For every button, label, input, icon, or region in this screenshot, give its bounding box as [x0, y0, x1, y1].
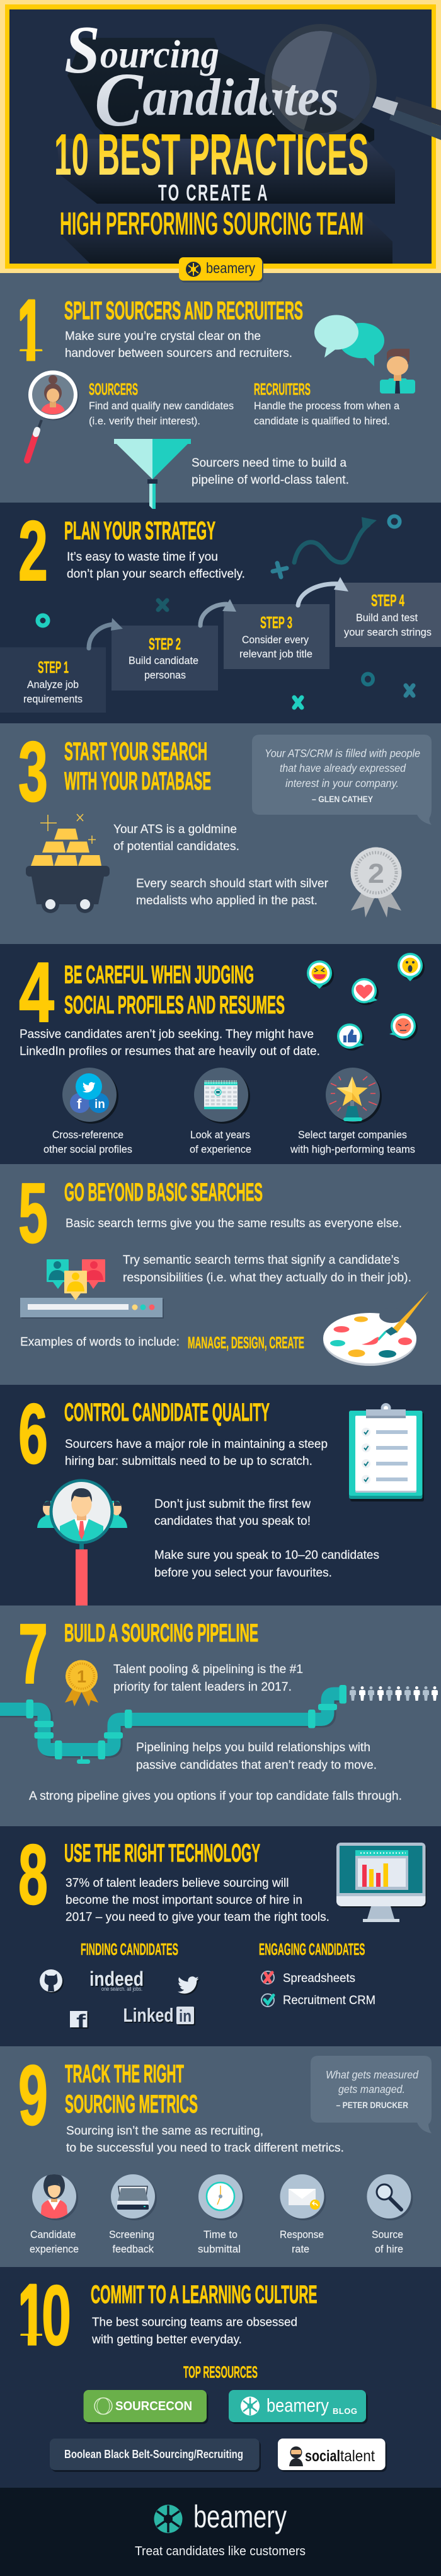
quote bubble: [252, 735, 432, 825]
arrow step 1 to 2: [89, 618, 123, 648]
candidates text: Don’t just submit the first few: [154, 1497, 311, 1511]
intro text: become the most important source of hire in: [66, 1893, 302, 1907]
funnel text: pipeline of world-class talent.: [192, 473, 349, 487]
icon: palette: [323, 1291, 429, 1366]
heading 8: USE THE RIGHT TECHNOLOGY: [64, 1839, 260, 1867]
icon: search bar with pins: [20, 1259, 164, 1319]
label: experience: [30, 2243, 79, 2255]
number 6: 6: [18, 1386, 48, 1481]
number 7: 7: [18, 1606, 48, 1701]
button: socialtalent: [278, 2439, 387, 2472]
label: [280, 2229, 324, 2255]
button: beamery blog: BLOG: [333, 2406, 357, 2416]
number 8: 8: [18, 1827, 48, 1922]
intro text: [65, 1437, 328, 1468]
icon: gold medal: 1: [77, 1667, 86, 1686]
calendar icon: [194, 1068, 250, 1124]
label: submittal: [198, 2243, 241, 2255]
candidates text: candidates that you speak to!: [154, 1514, 311, 1528]
social profiles icon: in: [94, 1098, 105, 1111]
award icon: [326, 1068, 382, 1124]
step 2: personas: [144, 669, 186, 681]
intro text: Sourcing isn’t the same as recruiting,: [66, 2124, 263, 2138]
captions: with high-performing teams: [290, 1143, 415, 1155]
candidates text: before you select your favourites.: [154, 1566, 332, 1580]
header panel: [0, 0, 441, 273]
section 4: [0, 944, 441, 1164]
label: [109, 2229, 154, 2255]
quote bubble: – PETER DRUCKER: [336, 2100, 408, 2110]
step 2: Build candidate: [129, 655, 198, 667]
sourcers column: (i.e. verify their interest).: [89, 415, 200, 427]
candidates text: Make sure you speak to 10–20 candidates: [154, 1548, 379, 1562]
quote bubble: [311, 2056, 432, 2133]
step 4: [335, 583, 441, 647]
beamery badge: [179, 257, 263, 283]
title script: ourcing: [100, 33, 219, 76]
captions: other social profiles: [43, 1143, 132, 1155]
spreadsheets item: Spreadsheets: [283, 1971, 355, 1985]
metric: screening feedback: [109, 2174, 157, 2255]
strong pipeline text: A strong pipeline gives you options if your top candidate falls through.: [29, 1789, 402, 1803]
heading 3: START YOUR SEARCH: [64, 738, 207, 766]
heading 4: [64, 961, 285, 1019]
captions: Cross-reference: [52, 1129, 123, 1141]
intro text: [66, 2124, 344, 2155]
funnel text: Sourcers need time to build a: [192, 456, 346, 470]
heading 7: BUILD A SOURCING PIPELINE: [64, 1619, 258, 1647]
heading 9: SOURCING METRICS: [65, 2090, 198, 2118]
recruiters column: Handle the process from when a: [254, 400, 400, 412]
icon: big magnifier with candidates: [37, 1479, 127, 1606]
silver medalists text: medalists who applied in the past.: [136, 894, 318, 907]
intro text: to be successful you need to track different metrics.: [66, 2141, 344, 2155]
intro text: [91, 2316, 297, 2346]
title script: S: [64, 13, 100, 88]
icon: recruiter man: [380, 349, 415, 393]
button: sourcecon: [84, 2390, 208, 2424]
intro text: Sourcers have a major role in maintaining a steep: [65, 1437, 328, 1451]
captions: [43, 1129, 415, 1155]
sourcers column: SOURCERS: [89, 380, 138, 399]
number 10: 0: [42, 2268, 71, 2363]
step 2: [112, 626, 218, 691]
quote bubble: – GLEN CATHEY: [312, 794, 374, 804]
emoji thumbs up: [337, 1023, 364, 1051]
number 4: 4: [19, 945, 54, 1040]
pipelining text: Pipelining helps you build relationships with: [136, 1740, 370, 1754]
heading 9: TRACK THE RIGHT: [65, 2060, 184, 2088]
semantic text: [123, 1253, 411, 1285]
intro text: The best sourcing teams are obsessed: [92, 2316, 297, 2329]
quote bubble: that have already expressed: [280, 762, 406, 774]
step 4: your search strings: [344, 626, 432, 638]
step 3: relevant job title: [239, 648, 312, 660]
step 4: STEP 4: [371, 591, 404, 610]
icon: speech bubbles: [314, 315, 384, 366]
section 9: [0, 2046, 441, 2267]
number 10: 1: [18, 2267, 45, 2362]
beamery badge: beamery: [206, 260, 255, 276]
intro text: hiring bar: submittals need to be up to scratch.: [65, 1454, 312, 1468]
button: boolean black belt: Boolean Black Belt-Sourcing/Recruiting: [64, 2448, 243, 2461]
intro text: [65, 329, 292, 360]
beamery logo: [154, 2499, 287, 2534]
logo: indeed: indeed: [89, 1967, 144, 1990]
semantic text: Try semantic search terms that signify a candidate’s: [123, 1253, 399, 1267]
logo: facebook: f: [76, 2011, 87, 2032]
icon: clipboard: [349, 1403, 424, 1501]
intro text: [67, 550, 245, 581]
button: beamery blog: [229, 2390, 368, 2424]
section 1: [20, 299, 415, 503]
section 7: [0, 1606, 441, 1826]
label: Screening: [109, 2229, 154, 2241]
sourcers column: Find and qualify new candidates: [89, 400, 234, 412]
icon: gold cart: [26, 814, 110, 913]
number 3: 3: [18, 724, 48, 819]
button: boolean black belt: [50, 2439, 261, 2472]
intro text: with getting better everyday.: [91, 2333, 242, 2346]
examples text: MANAGE, DESIGN, CREATE: [188, 1333, 304, 1352]
label: [30, 2229, 79, 2255]
logo: twitter: [178, 1976, 200, 1995]
label: Time to: [203, 2229, 238, 2241]
candidates text: [154, 1497, 379, 1580]
section 5: [0, 1164, 441, 1385]
label: Response: [280, 2229, 324, 2241]
logo: linkedin: Linked: [124, 2005, 175, 2027]
emoji angry: [389, 1013, 418, 1040]
number 9: 9: [18, 2048, 48, 2143]
body text: [20, 1027, 320, 1058]
title script: andidates: [142, 68, 339, 127]
recruitment crm item: Recruitment CRM: [283, 1993, 375, 2007]
priority text: [113, 1662, 303, 1694]
beamery logo: beamery: [193, 2499, 287, 2534]
logo: indeed: indeed: [91, 1969, 145, 1991]
metric: source of hire: [367, 2174, 413, 2255]
body text: LinkedIn profiles or resumes that are heavily out of date.: [20, 1044, 320, 1058]
pipelining text: passive candidates that aren’t ready to move.: [136, 1758, 377, 1772]
section 3: [0, 723, 441, 944]
step 3: STEP 3: [260, 613, 292, 632]
examples text: Examples of words to include:: [20, 1335, 180, 1349]
goldmine text: of potential candidates.: [113, 839, 239, 853]
quote bubble: gets managed.: [338, 2083, 405, 2095]
label: [198, 2229, 241, 2255]
captions: of experience: [190, 1143, 251, 1155]
label: rate: [292, 2243, 309, 2255]
section 2: [0, 503, 441, 723]
step 4: Build and test: [356, 612, 418, 624]
title script: C: [94, 57, 144, 143]
step 1: STEP 1: [38, 658, 69, 677]
logo: github: [40, 1969, 64, 1993]
icon: gold medal: [65, 1662, 98, 1706]
captions: Select target companies: [298, 1129, 407, 1141]
sourcers column: [89, 380, 234, 427]
quote bubble: interest in your company.: [285, 777, 399, 790]
section 6: [20, 1402, 424, 1606]
semantic text: responsibilities (i.e. what they actually do in their job).: [123, 1271, 411, 1285]
social profiles icon: [62, 1068, 118, 1124]
recruiters column: [254, 380, 400, 427]
label: of hire: [375, 2243, 403, 2255]
step 1: [0, 647, 106, 713]
intro text: [66, 1876, 329, 1924]
body text: Passive candidates aren’t job seeking. They might have: [20, 1027, 314, 1041]
arrow step 2 to 3: [200, 599, 236, 626]
row of people: [350, 1686, 438, 1701]
number 1: 1: [18, 283, 43, 378]
label: feedback: [112, 2243, 154, 2255]
heading 3: WITH YOUR DATABASE: [64, 767, 211, 795]
metric: candidate experience: [30, 2172, 79, 2255]
goldmine text: Your ATS is a goldmine: [113, 822, 237, 836]
magnifier ring: [268, 28, 373, 136]
pipelining text: [136, 1740, 377, 1772]
section 10: [20, 2284, 387, 2472]
emoji wow: [398, 953, 425, 981]
button: sourcecon: SOURCECON: [115, 2399, 192, 2413]
captions: Look at years: [190, 1129, 250, 1141]
label: [372, 2229, 403, 2255]
intro text: Make sure you’re crystal clear on the: [65, 329, 261, 343]
section 1 background: [0, 273, 441, 503]
intro text: Basic search terms give you the same results as everyone else.: [66, 1216, 402, 1230]
footer panel: [0, 2488, 441, 2576]
squiggle arrow: [294, 517, 377, 562]
intro text: don’t plan your search effectively.: [67, 567, 245, 581]
icon: silver medal: 2: [368, 858, 384, 889]
title lines: TO CREATE A: [158, 180, 269, 206]
arrow step 3 to 4: [298, 577, 348, 605]
metric: time to submittal: [198, 2174, 244, 2255]
logo: indeed: one search. all jobs.: [101, 1986, 142, 1992]
button: socialtalent: social: [305, 2447, 340, 2465]
metric: response rate: [280, 2174, 326, 2255]
top resources heading: TOP RESOURCES: [183, 2362, 258, 2381]
intro text: 2017 – you need to give your team the right tools.: [66, 1910, 329, 1924]
priority text: Talent pooling & pipelining is the #1: [113, 1662, 303, 1676]
heading 9: [65, 2060, 198, 2118]
goldmine text: [113, 822, 239, 853]
tagline: Treat candidates like customers: [135, 2544, 306, 2558]
social profiles icon: f: [77, 1096, 82, 1112]
number 5: 5: [18, 1165, 48, 1261]
step 2: STEP 2: [149, 634, 181, 653]
emoji laugh: [307, 960, 334, 989]
title lines: [54, 122, 369, 242]
icon: sourcer magnifier: [27, 371, 79, 460]
step 3: [224, 604, 329, 669]
intro text: It’s easy to waste time if you: [67, 550, 218, 564]
quote bubble: Your ATS/CRM is filled with people: [265, 747, 420, 759]
number 10: [20, 2284, 69, 2346]
priority text: priority for talent leaders in 2017.: [113, 1680, 292, 1694]
title script: [64, 13, 339, 143]
intro text: handover between sourcers and recruiters.: [65, 346, 292, 360]
step 1: Analyze job: [27, 679, 79, 691]
logo: linkedin: in: [179, 2007, 192, 2025]
funnel text: [192, 456, 349, 487]
label: Candidate: [30, 2229, 76, 2241]
recruiters column: RECRUITERS: [254, 380, 311, 399]
number 2: 2: [18, 503, 48, 598]
quote bubble: What gets measured: [326, 2068, 419, 2081]
step 1: requirements: [23, 693, 83, 705]
silver medalists text: Every search should start with silver: [136, 877, 328, 890]
button: socialtalent: talent: [340, 2447, 375, 2465]
emoji heart: [352, 978, 379, 1005]
logo: facebook: [70, 2011, 88, 2032]
heading 5: GO BEYOND BASIC SEARCHES: [64, 1179, 263, 1206]
section 8: [0, 1826, 441, 2046]
finding candidates heading: FINDING CANDIDATES: [81, 1940, 178, 1959]
logo: linkedin: Linked: [123, 2004, 174, 2026]
icon: monitor: [336, 1843, 427, 1922]
step 3: Consider every: [242, 634, 309, 646]
silver medalists text: [136, 877, 328, 907]
heading 2: PLAN YOUR STRATEGY: [64, 517, 215, 545]
button: beamery blog: beamery: [266, 2395, 329, 2416]
recruiters column: candidate is qualified to hired.: [254, 415, 390, 427]
intro text: 37% of talent leaders believe sourcing will: [66, 1876, 289, 1890]
decorative markers: [38, 516, 413, 708]
label: Source: [372, 2229, 403, 2241]
pipeline: [0, 1685, 346, 1764]
examples text: [20, 1333, 304, 1352]
heading 4: BE CAREFUL WHEN JUDGING: [64, 961, 254, 989]
magnifying glass: [271, 25, 441, 140]
icon: silver medal: [351, 849, 401, 918]
icon: funnel: [114, 439, 191, 509]
heading 3: [64, 738, 211, 795]
